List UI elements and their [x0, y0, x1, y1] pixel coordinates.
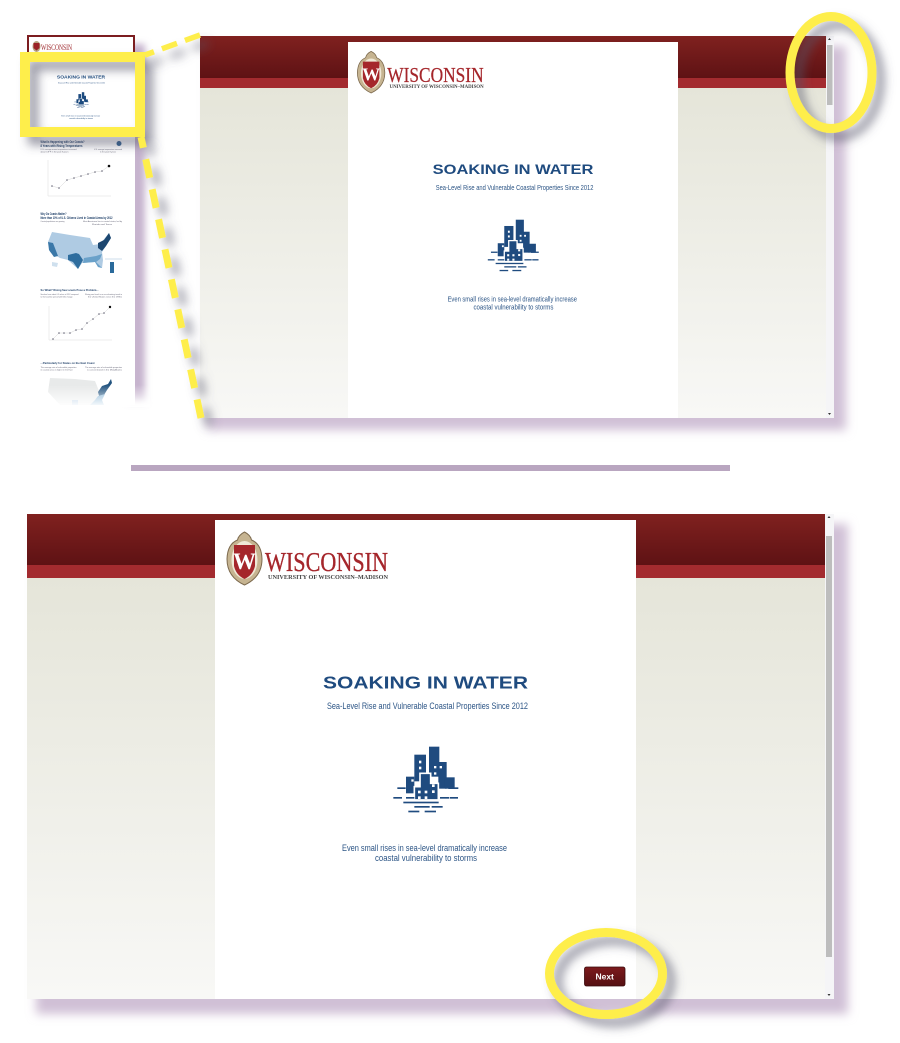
bottom icon: city on water [393, 747, 458, 812]
thumbnail section: rising temperatures: U.S. average ocean temperature increased [40, 148, 76, 151]
bottom window header [27, 514, 825, 565]
top title: SOAKING IN WATER [433, 162, 594, 177]
top tagline: coastal vulnerability to storms [473, 304, 554, 311]
thumbnail section: rising sea level chart: So What? Rising Sea Levels Pose a Problem... [40, 288, 99, 292]
thumbnail section: rising sea level chart: Sea-level rose about 0.3 inches in 2012 compared [40, 293, 78, 296]
top logo: UNIVERSITY OF WISCONSIN–MADISON [390, 84, 484, 90]
bottom window page content [227, 532, 625, 986]
thumbnail section: rising temperatures: What Is Happening with Our Coasts? [40, 140, 85, 144]
thumbnail title block: Even small rises in sea-level dramatically increase [61, 115, 101, 118]
bottom tagline [342, 843, 507, 863]
thumbnail title block: coastal vulnerability to storms [69, 117, 93, 120]
thumbnail title block: SOAKING IN WATER [57, 75, 105, 80]
bottom window scrollbar [825, 514, 834, 999]
thumbnail section: east coast map: The average rate of vulnerable properties [40, 366, 76, 369]
top icon: city on water [488, 220, 539, 271]
thumbnail section: coastal states map [40, 212, 122, 273]
bottom subtitle: Sea-Level Rise and Vulnerable Coastal Properties Since 2012 [327, 701, 528, 711]
thumbnail title block: Sea-Level Rise and Vulnerable Coastal Properties Since 2012 [58, 81, 106, 84]
thumbnail section: rising temperatures: 8 Years with Rising Temperatures [40, 144, 83, 148]
top window white page [348, 42, 678, 418]
top browser window [200, 36, 846, 430]
top logo: WISCONSIN [387, 63, 484, 87]
top tagline: Even small rises in sea-level dramatically increase [448, 297, 577, 304]
top window header [200, 36, 826, 78]
bottom tagline: coastal vulnerability to storms [375, 853, 478, 863]
top subtitle: Sea-Level Rise and Vulnerable Coastal Properties Since 2012 [436, 185, 593, 192]
thumbnail section: rising sea level chart [40, 288, 122, 340]
bottom tagline: Even small rises in sea-level dramatically increase [342, 843, 507, 853]
bottom logo: WISCONSIN [265, 547, 388, 577]
thumbnail section: rising sea level chart: to the baseline period with little change [40, 296, 73, 298]
thumbnail section: east coast map: in coastal areas is higher in the East [40, 368, 73, 372]
next button: Next [595, 972, 614, 982]
bottom window white page [215, 520, 636, 999]
yellow ellipse around next button [550, 932, 662, 1014]
thumbnail section: coastal states map: More than 10% of U.S. Citizens Lived in Coastal Areas by 2012 [40, 216, 113, 220]
thumbnail title block [57, 75, 106, 120]
divider bar [131, 465, 730, 471]
thumbnail section: rising temperatures [40, 140, 122, 196]
thumbnail section: coastal states map: Most Americans live in coastal states, led by [83, 220, 122, 223]
top logo [357, 51, 484, 93]
yellow ellipse around scrollbar [790, 16, 872, 128]
bottom logo: UNIVERSITY OF WISCONSIN–MADISON [268, 574, 388, 581]
top tagline [448, 297, 577, 311]
thumbnail section: east coast map [40, 361, 122, 405]
yellow dashed connector to top window corner [145, 35, 200, 55]
thumbnail section: rising temperatures: in the past 8 years [100, 150, 116, 154]
thumbnail logo: WISCONSIN [41, 43, 72, 52]
bottom browser window [27, 514, 848, 1014]
yellow highlight rectangle around title slide [25, 57, 140, 132]
thumbnail logo [32, 41, 72, 52]
yellow dashed connector to window bottom [141, 137, 201, 418]
bottom title: SOAKING IN WATER [323, 672, 528, 692]
thumbnail section: east coast map: ...Particularly for States on the East Coast [40, 361, 94, 365]
thumbnail section: rising sea level chart: the United States since the 1980s [88, 296, 122, 298]
thumbnail section: rising temperatures: about 0.8°F in the past 8 years [40, 150, 68, 154]
thumbnail section: east coast map: The average rate of vulnerable properties [85, 366, 122, 369]
bottom logo: W [233, 549, 256, 574]
thumbnail section: east coast map: is concentrated in the Mid-Atlantic [87, 368, 122, 372]
thumbnail section: coastal states map: Coastal populations are growing [40, 220, 64, 223]
bottom logo [227, 532, 388, 585]
top logo: W [362, 64, 380, 84]
thumbnail section: coastal states map: Why Do Coasts Matter? [40, 212, 67, 216]
top window scrollbar [826, 36, 834, 418]
thumbnail page strip [25, 35, 150, 407]
thumbnail section: rising temperatures: U.S. average temperature increased [94, 148, 122, 151]
thumbnail section: rising sea level chart: Rising sea level is an accelerating trend in [85, 293, 122, 296]
top window page content [357, 51, 594, 311]
next button [584, 967, 625, 986]
thumbnail section: coastal states map: Florida and Texas [92, 224, 112, 226]
